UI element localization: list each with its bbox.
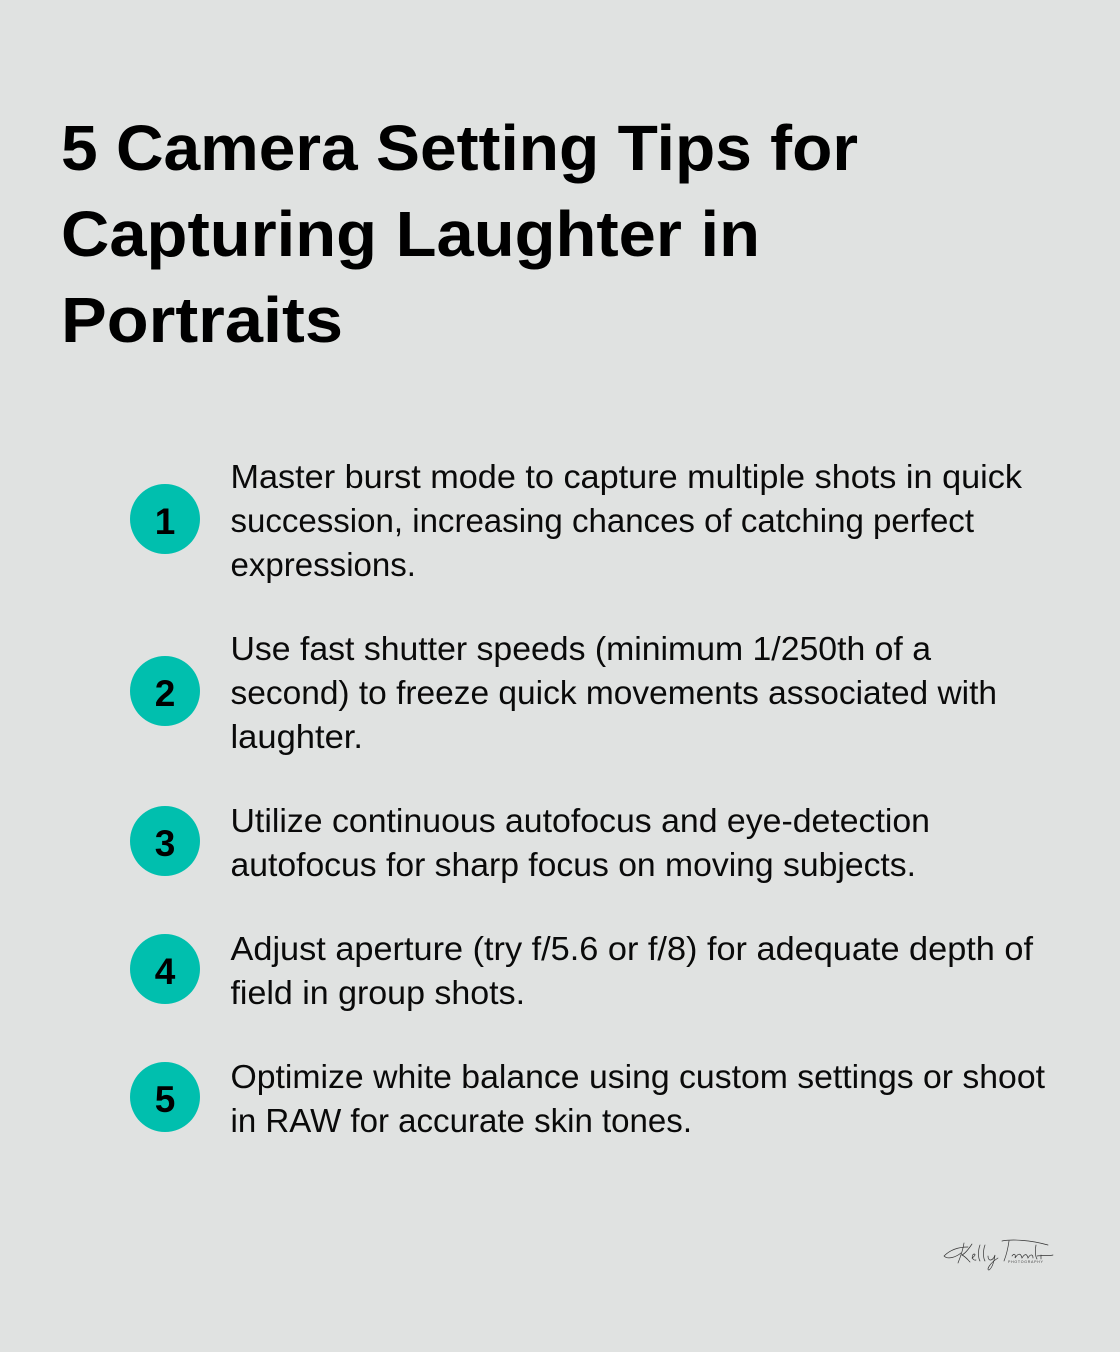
text: autofocus tip: Utilize continuous autofocus and eye-detection (230, 802, 930, 839)
text: burst mode tip: Master burst mode to capture multiple shots in quick (230, 458, 1023, 495)
list item 3 (130, 802, 930, 883)
number badge 4: 4 (155, 951, 176, 992)
title: Portraits (61, 284, 343, 356)
text: burst mode tip: expressions. (230, 546, 416, 583)
title (61, 112, 858, 356)
number badge 3: 3 (155, 823, 175, 864)
title: Capturing Laughter in (61, 198, 760, 270)
title: 5 Camera Setting Tips for (61, 112, 858, 184)
number badge 3 (130, 806, 200, 876)
number badge 2: 2 (155, 673, 175, 714)
text: white balance tip (230, 1058, 1045, 1139)
signature subtitle: PHOTOGRAPHY (1008, 1260, 1044, 1264)
number badge 2 (130, 656, 200, 726)
number badge 4 (130, 934, 200, 1004)
number badge 5: 5 (155, 1079, 175, 1120)
list item 5 (130, 1058, 1045, 1139)
text: shutter speed tip: Use fast shutter speeds (minimum 1/250th of a (230, 630, 932, 667)
list item 2 (130, 630, 997, 755)
signature logo (944, 1240, 1053, 1270)
text: autofocus tip: autofocus for sharp focus on moving subjects. (230, 846, 916, 883)
number badge 1: 1 (155, 501, 175, 542)
text: shutter speed tip: second) to freeze quick movements associated with (230, 674, 997, 711)
number badge 1 (130, 484, 200, 554)
text: aperture tip (230, 930, 1034, 1011)
text: burst mode tip: succession, increasing chances of catching perfect (230, 502, 974, 539)
text: shutter speed tip: laughter. (230, 718, 363, 755)
text: aperture tip: field in group shots. (230, 974, 525, 1011)
text: burst mode tip (230, 458, 1023, 583)
list item 1 (130, 458, 1023, 583)
text: aperture tip: Adjust aperture (try f/5.6 or f/8) for adequate depth of (230, 930, 1034, 967)
number badge 5 (130, 1062, 200, 1132)
text: white balance tip: in RAW for accurate skin tones. (230, 1102, 692, 1139)
list item 4 (130, 930, 1034, 1011)
text: autofocus tip (230, 802, 930, 883)
text: white balance tip: Optimize white balance using custom settings or shoot (230, 1058, 1045, 1095)
text: shutter speed tip (230, 630, 997, 755)
